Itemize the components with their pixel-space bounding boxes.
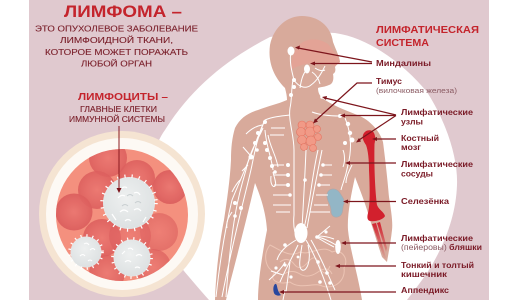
- label: lymph vessels: [401, 159, 473, 178]
- text block: definition of lymphoma: [35, 24, 198, 68]
- label: lymph vessels: Лимфатические: [401, 159, 473, 169]
- label: Peyer's patches: Лимфатические: [401, 233, 473, 243]
- illustration: human body silhouette: [215, 16, 392, 300]
- arrow: tonsils upper: [295, 46, 372, 62]
- label: small and large intestine: кишечник: [401, 269, 448, 279]
- label: bone marrow: [401, 133, 439, 152]
- arrow: thymus: [313, 83, 372, 124]
- label: bone marrow: мозг: [401, 142, 421, 152]
- title: ЛИМФОМА –: [64, 2, 182, 21]
- label: appendix: Аппендикс: [401, 285, 449, 295]
- heading: lymphatic system: СИСТЕМА: [376, 37, 429, 49]
- arrow: lymph node armpit: [356, 116, 396, 142]
- illustration: mouth and throat: [290, 39, 340, 70]
- label: lymph vessels: сосуды: [401, 168, 433, 178]
- illustration: magnified lymphocytes circle: [39, 131, 205, 297]
- arrow: lymph node neck: [322, 96, 396, 115]
- text block: definition of lymphoma: ЛЮБОЙ ОРГАН: [81, 58, 152, 68]
- text block: lymphocytes definition: ИММУННОЙ СИСТЕМЫ: [69, 115, 165, 124]
- illustration: lymphatic vessels and nodes: [216, 46, 354, 300]
- illustration: arm bone marrow: [363, 130, 387, 258]
- label: lymph nodes: Лимфатические: [401, 107, 473, 117]
- heading: lymphatic system: ЛИМФАТИЧЕСКАЯ: [376, 24, 479, 36]
- label: small and large intestine: [401, 260, 474, 279]
- label: bone marrow: Костный: [401, 133, 439, 143]
- label: small and large intestine: Тонкий и толтый: [401, 260, 474, 270]
- label: tonsils: Миндалины: [376, 58, 431, 68]
- heading: lymphocytes: ЛИМФОЦИТЫ –: [78, 91, 168, 103]
- label: thymus: (вилочковая железа): [376, 86, 458, 95]
- panel: white body backdrop: [149, 33, 457, 300]
- text block: definition of lymphoma: ЭТО ОПУХОЛЕВОЕ ЗАБОЛЕВАНИЕ: [35, 24, 198, 34]
- illustration: intestines: [266, 245, 346, 287]
- arrow: lymphocytes to cell: [116, 126, 122, 193]
- label: Peyer's patches: (пейеровы) бляшки: [401, 242, 482, 252]
- arrow: intestine: [335, 264, 396, 268]
- arrow: lymph vessels: [345, 161, 396, 165]
- label: thymus: Тимус: [376, 76, 402, 86]
- label: lymph nodes: [401, 107, 473, 126]
- label: spleen: Селезёнка: [401, 196, 449, 206]
- text block: lymphocytes definition: ГЛАВНЫЕ КЛЕТКИ: [80, 105, 157, 114]
- label: lymph nodes: узлы: [401, 116, 423, 126]
- arrow: tonsils lower: [310, 62, 372, 66]
- arrow: lymph node chest: [340, 114, 396, 118]
- label: Peyer's patches: [401, 233, 482, 252]
- illustration: spleen: [327, 189, 344, 217]
- text block: lymphocytes definition: [69, 105, 165, 124]
- arrow: Peyer's patches: [341, 241, 396, 245]
- text block: definition of lymphoma: ЛИМФОИДНОЙ ТКАНИ,: [60, 34, 173, 45]
- arrow: appendix: [279, 290, 396, 294]
- illustration: appendix: [273, 284, 281, 296]
- label: thymus: [376, 76, 458, 95]
- arrow: bone marrow: [372, 137, 396, 141]
- illustration: thymus: [296, 121, 322, 152]
- arrow: spleen: [343, 200, 396, 204]
- text block: definition of lymphoma: КОТОРОЕ МОЖЕТ ПОРАЖАТЬ: [45, 47, 188, 57]
- heading: lymphatic system: [376, 24, 479, 49]
